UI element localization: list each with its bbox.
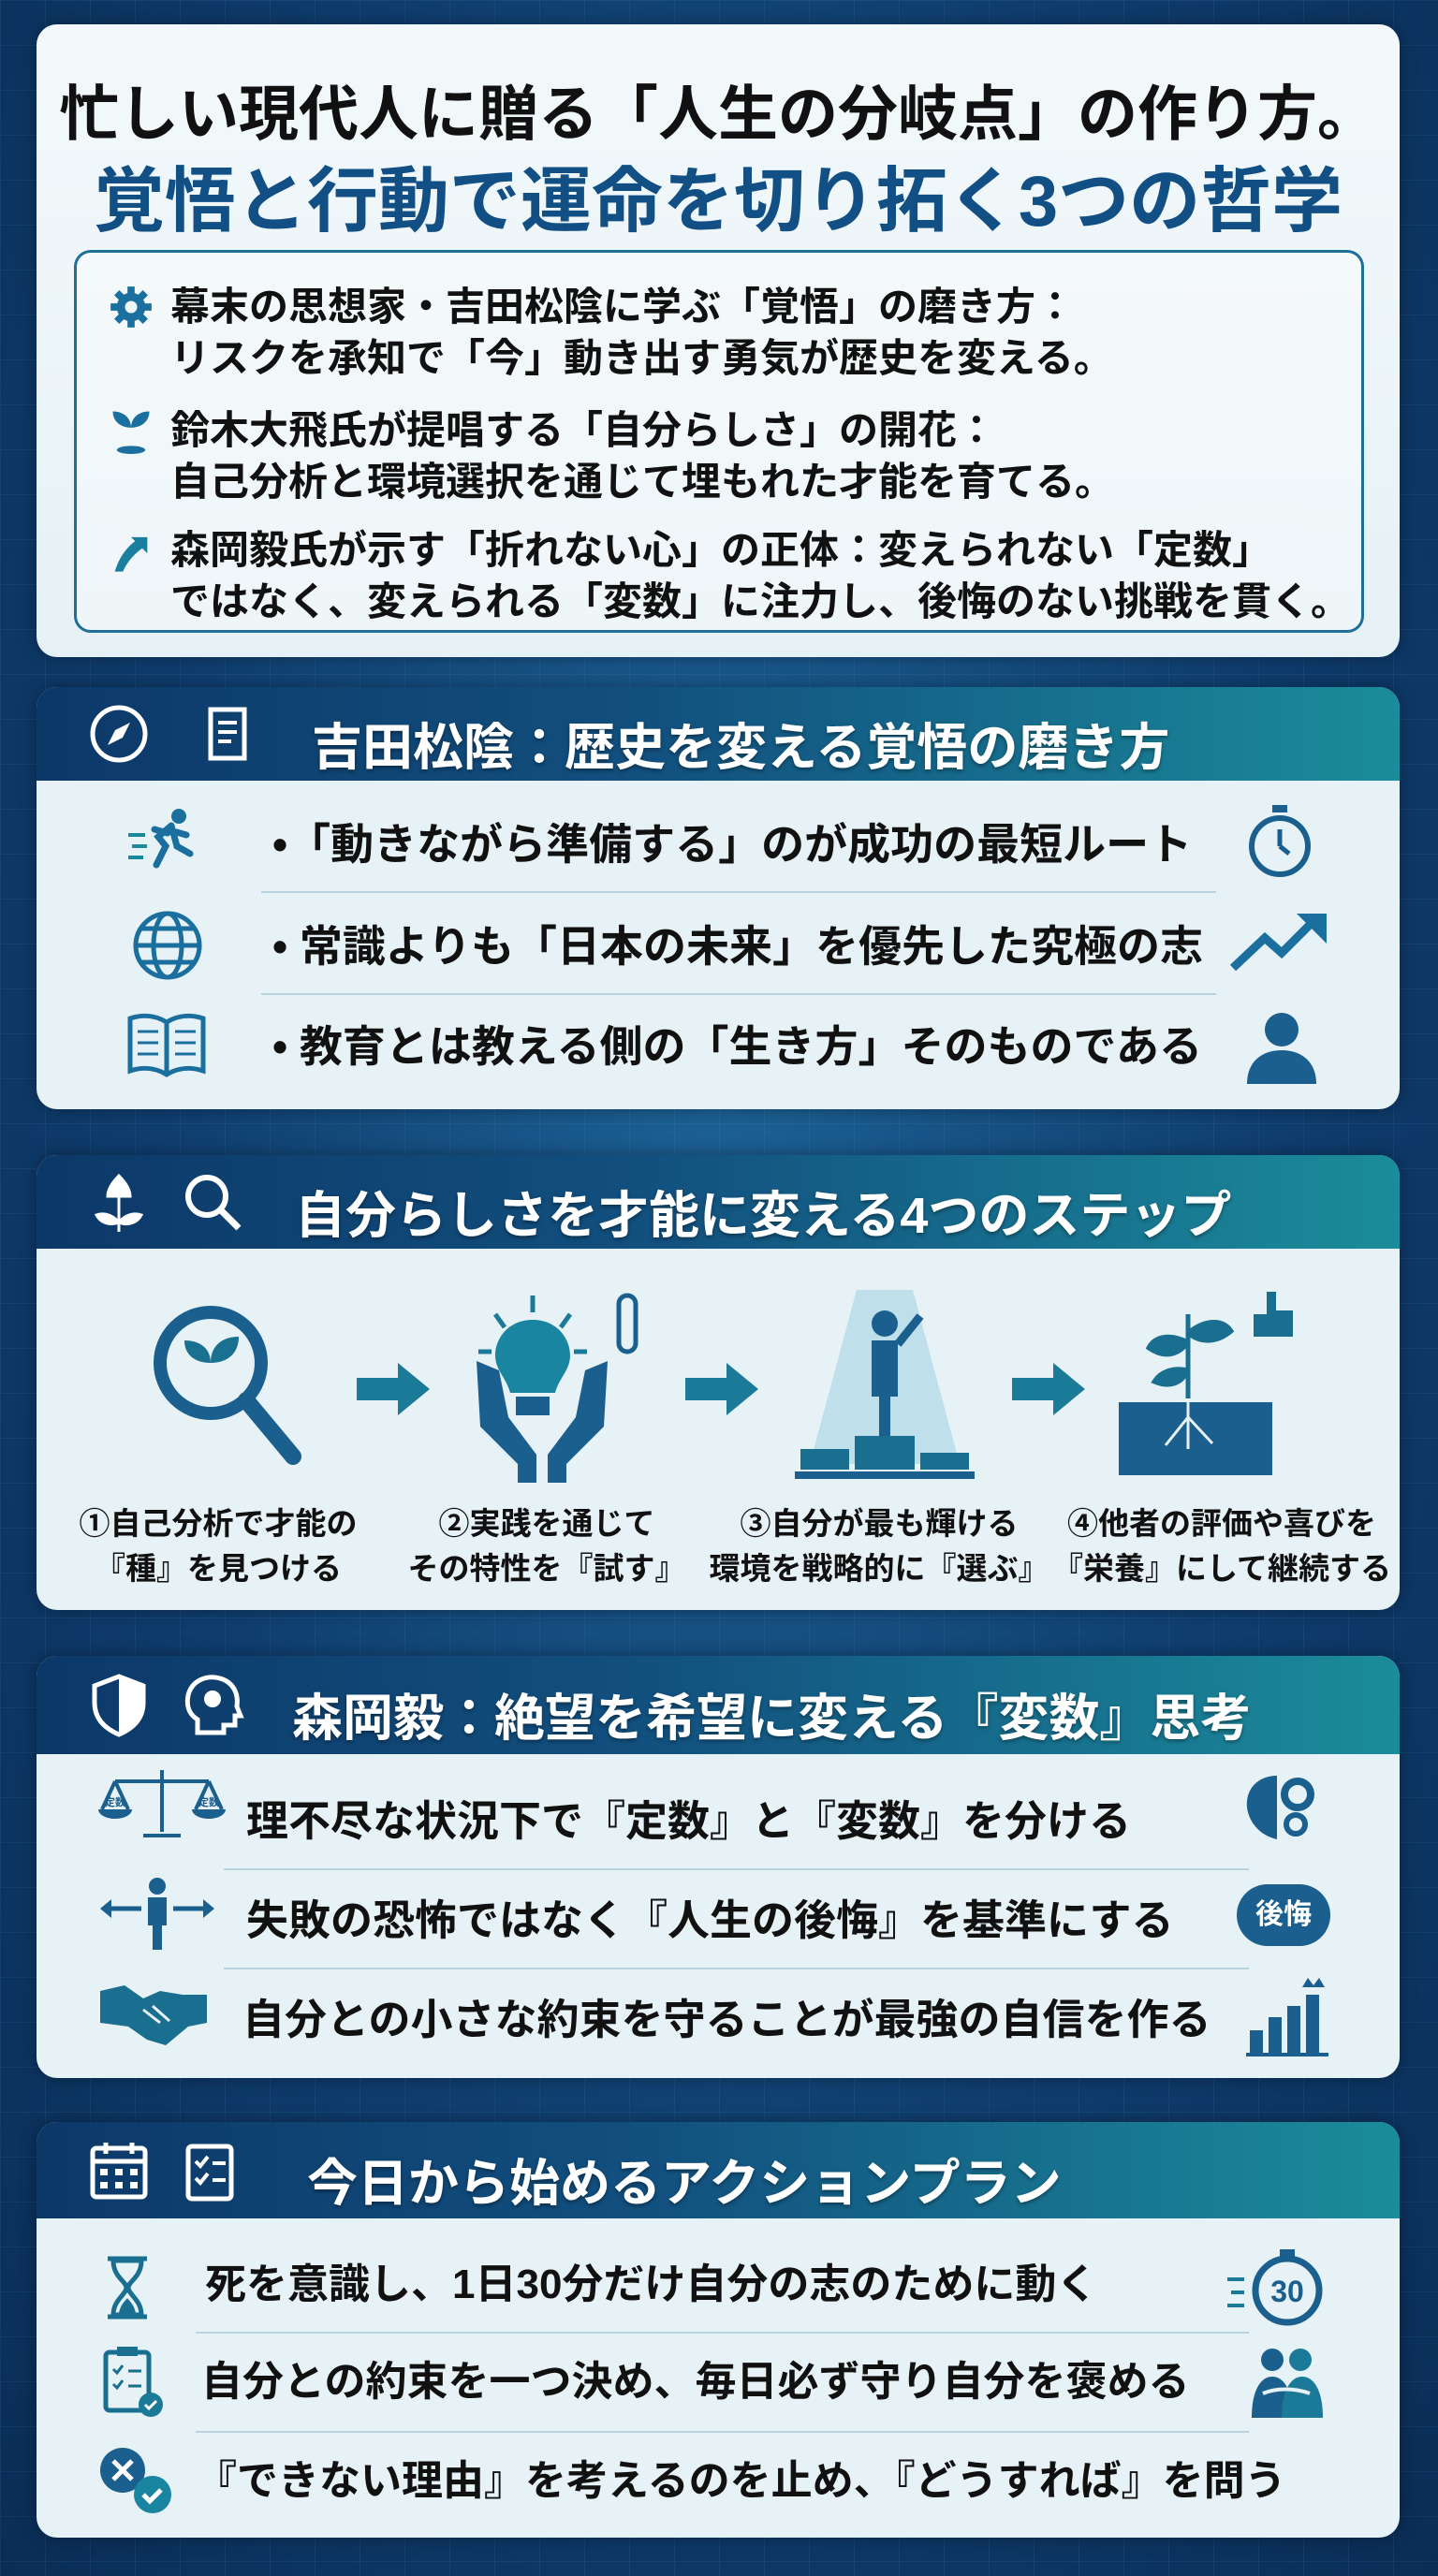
icon: tulip (94, 1174, 144, 1232)
icon: scales: 定数 (198, 1795, 219, 1808)
row 3: 『できない理由』を考えるのを止め、『どうすれば』を問う (196, 2458, 1286, 2504)
row 1: 理不尽な状況下で『定数』と『変数』を分ける (246, 1797, 1131, 1845)
icon: trend arrow (1230, 914, 1327, 972)
icon: chat bubbles (95, 2444, 179, 2519)
icon: magnifier with sprout (154, 1306, 301, 1465)
text: point 2: 自己分析と環境選択を通じて埋もれた才能を育てる。 (170, 460, 1114, 504)
caption 3 (710, 1506, 1049, 1586)
icon: person on podium (795, 1290, 975, 1479)
heading: 自分らしさを才能に変える4つのステップ (295, 1188, 1231, 1244)
icon: speech bubble 後悔: 後悔 (1255, 1899, 1312, 1930)
summary box (74, 250, 1364, 633)
icon: stopwatch (1249, 805, 1311, 877)
caption 2 (408, 1506, 685, 1586)
icon: scroll (208, 708, 247, 760)
row 2: 失敗の恐怖ではなく『人生の後悔』を基準にする (246, 1896, 1173, 1944)
icon: speech bubble 後悔 (1237, 1884, 1330, 1946)
text: point 2 (170, 408, 1114, 504)
arrow 3 (1012, 1363, 1085, 1415)
row 2: • 常識よりも「日本の未来」を優先した究極の志 (272, 922, 1203, 971)
caption 4: 『栄養』にして継続する (1052, 1551, 1391, 1586)
text: point 3: ではなく、変えられる「変数」に注力し、後悔のない挑戦を貫く。 (170, 579, 1350, 623)
caption 3: 環境を戦略的に『選ぶ』 (710, 1551, 1049, 1586)
caption 2: ②実践を通じて (438, 1506, 655, 1541)
icon: sprout (112, 412, 150, 454)
row 1: •「動きながら準備する」のが成功の最短ルート (272, 820, 1192, 869)
icon: shield (92, 1674, 146, 1737)
icon: brain gear (1247, 1776, 1314, 1839)
header (37, 1155, 1400, 1249)
caption 4: ④他者の評価や喜びを (1067, 1506, 1376, 1541)
icon: hands with bulb (477, 1294, 638, 1483)
row 3: • 教育とは教える側の「生き方」そのものである (272, 1022, 1202, 1071)
icon: bar chart crown (1246, 1978, 1328, 2056)
text: point 1: 幕末の思想家・吉田松陰に学ぶ「覚悟」の磨き方： (170, 285, 1075, 329)
header (37, 687, 1400, 781)
icon: plant with roots (1119, 1292, 1293, 1475)
title line 2: 覚悟と行動で運命を切り拓く3つの哲学 (94, 162, 1343, 242)
text: point 1: リスクを承知で「今」動き出す勇気が歴史を変える。 (170, 336, 1113, 380)
icon: handshake (100, 1985, 207, 2045)
header (37, 1656, 1400, 1754)
icon: hourglass (108, 2256, 147, 2320)
text: point 2: 鈴木大飛氏が提唱する「自分らしさ」の開花： (170, 408, 996, 452)
caption 1: ①自己分析で才能の (79, 1506, 358, 1541)
header (37, 2122, 1400, 2218)
caption 3: ③自分が最も輝ける (740, 1506, 1019, 1541)
icon: gear (110, 286, 152, 328)
heading: 吉田松陰：歴史を変える覚悟の磨き方 (312, 720, 1169, 776)
arrow 2 (685, 1363, 758, 1415)
panel: Yoshida Shoin (37, 687, 1400, 1109)
caption 4 (1052, 1506, 1391, 1586)
heading: 今日から始めるアクションプラン (307, 2156, 1062, 2212)
icon: compass (90, 706, 148, 762)
caption 1 (79, 1506, 358, 1586)
row 2: 自分との約束を一つ決め、毎日必ず守り自分を褒める (201, 2359, 1190, 2405)
icon: clipboard (103, 2347, 163, 2417)
text: point 3: 森岡毅氏が示す「折れない心」の正体：変えられない「定数」 (170, 528, 1271, 572)
icon: checklist (185, 2144, 234, 2202)
heading: 森岡毅：絶望を希望に変える『変数』思考 (292, 1690, 1251, 1747)
icon: scales: 定数 (105, 1795, 125, 1808)
icon: hug (1252, 2349, 1323, 2418)
panel: action plan (37, 2122, 1400, 2538)
icon: person (1247, 1013, 1316, 1084)
icon: open book (127, 1013, 206, 1077)
panel: Morioka (37, 1656, 1400, 2078)
panel: title (37, 24, 1400, 657)
caption 1: 『種』を見つける (95, 1551, 342, 1586)
title line 1: 忙しい現代人に贈る「人生の分岐点」の作り方。 (59, 80, 1377, 148)
icon: head gears (185, 1675, 244, 1735)
row 3: 自分との小さな約束を守ることが最強の自信を作る (242, 1996, 1211, 2043)
icon: 30 timer: 30 (1270, 2275, 1304, 2308)
icon: runner (128, 809, 193, 869)
icon: 30 timer (1227, 2249, 1322, 2325)
caption 2: その特性を『試す』 (408, 1551, 685, 1586)
text: point 3 (170, 528, 1350, 623)
icon: scales (98, 1770, 226, 1837)
icon: magnifier (185, 1175, 242, 1230)
icon: globe (133, 912, 202, 979)
panel: 4 steps (37, 1155, 1400, 1610)
text: point 1 (170, 285, 1113, 380)
arrow 1 (357, 1363, 430, 1415)
icon: calendar (90, 2143, 148, 2200)
row 1: 死を意識し、1日30分だけ自分の志のために動く (205, 2261, 1097, 2307)
icon: up arrow (114, 537, 148, 572)
icon: crossroads person (100, 1878, 214, 1950)
